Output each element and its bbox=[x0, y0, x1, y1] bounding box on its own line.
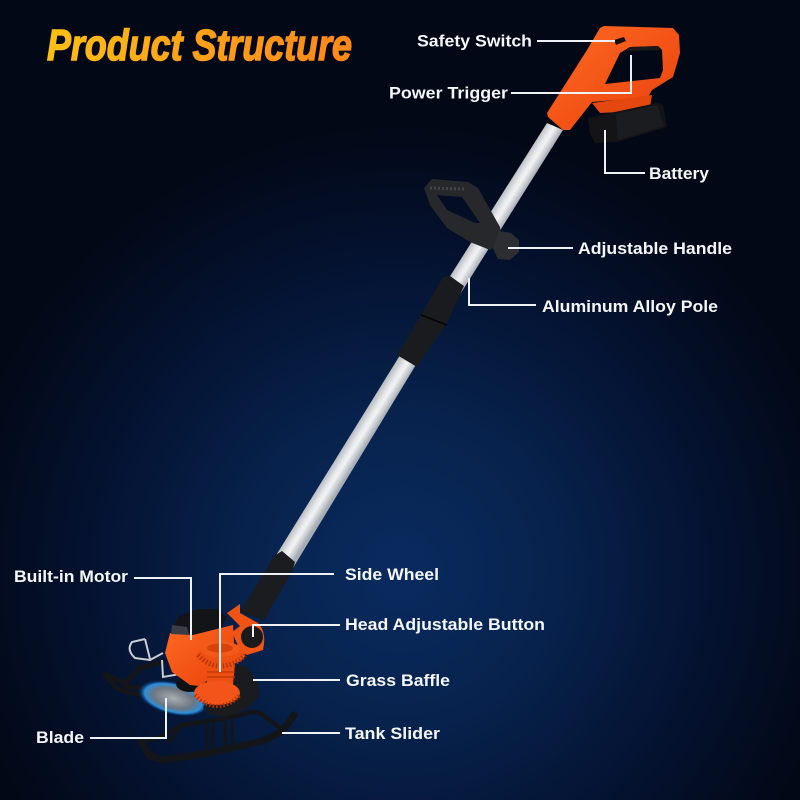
title: Product Structure bbox=[47, 21, 352, 70]
label: Side Wheel: Side Wheel bbox=[345, 565, 439, 584]
label: Battery bbox=[605, 130, 710, 183]
side wheel bbox=[194, 641, 245, 706]
label: Aluminum Alloy Pole bbox=[469, 278, 718, 316]
motor housing bbox=[165, 609, 235, 692]
label: Built-in Motor bbox=[14, 567, 191, 640]
rear slider bbox=[105, 662, 162, 695]
tank slider bbox=[140, 712, 294, 760]
label: Safety Switch: Safety Switch bbox=[417, 32, 532, 50]
battery mount bbox=[592, 95, 652, 113]
label: Power Trigger: Power Trigger bbox=[389, 84, 508, 102]
safety switch button bbox=[614, 37, 626, 45]
pole collar bbox=[397, 276, 464, 367]
label: Adjustable Handle: Adjustable Handle bbox=[578, 239, 732, 258]
trimmer product illustration bbox=[105, 26, 680, 760]
head adjuster arm bbox=[227, 604, 264, 655]
label: Tank Slider: Tank Slider bbox=[345, 724, 440, 743]
battery pack bbox=[588, 103, 667, 143]
label: Grass Baffle: Grass Baffle bbox=[346, 671, 450, 690]
grass baffle bbox=[203, 665, 259, 717]
label: Head Adjustable Button bbox=[253, 615, 545, 637]
label: Power Trigger bbox=[389, 55, 631, 102]
label: Aluminum Alloy Pole: Aluminum Alloy Pole bbox=[542, 297, 718, 316]
aluminum pole bbox=[275, 123, 563, 568]
motor rear sleeve bbox=[240, 551, 295, 620]
label: Built-in Motor: Built-in Motor bbox=[14, 567, 128, 586]
label: Side Wheel bbox=[220, 565, 439, 672]
label: Battery: Battery bbox=[649, 164, 710, 183]
adjustable handle bbox=[424, 179, 519, 260]
power trigger bbox=[626, 46, 660, 51]
head adjustable button bbox=[241, 626, 263, 648]
label: Head Adjustable Button: Head Adjustable Button bbox=[345, 615, 545, 634]
label: Blade: Blade bbox=[36, 728, 84, 747]
label: Blade bbox=[36, 698, 166, 747]
wire guard bbox=[130, 639, 203, 677]
blade bbox=[134, 674, 210, 722]
motor handle grip bbox=[547, 26, 680, 130]
